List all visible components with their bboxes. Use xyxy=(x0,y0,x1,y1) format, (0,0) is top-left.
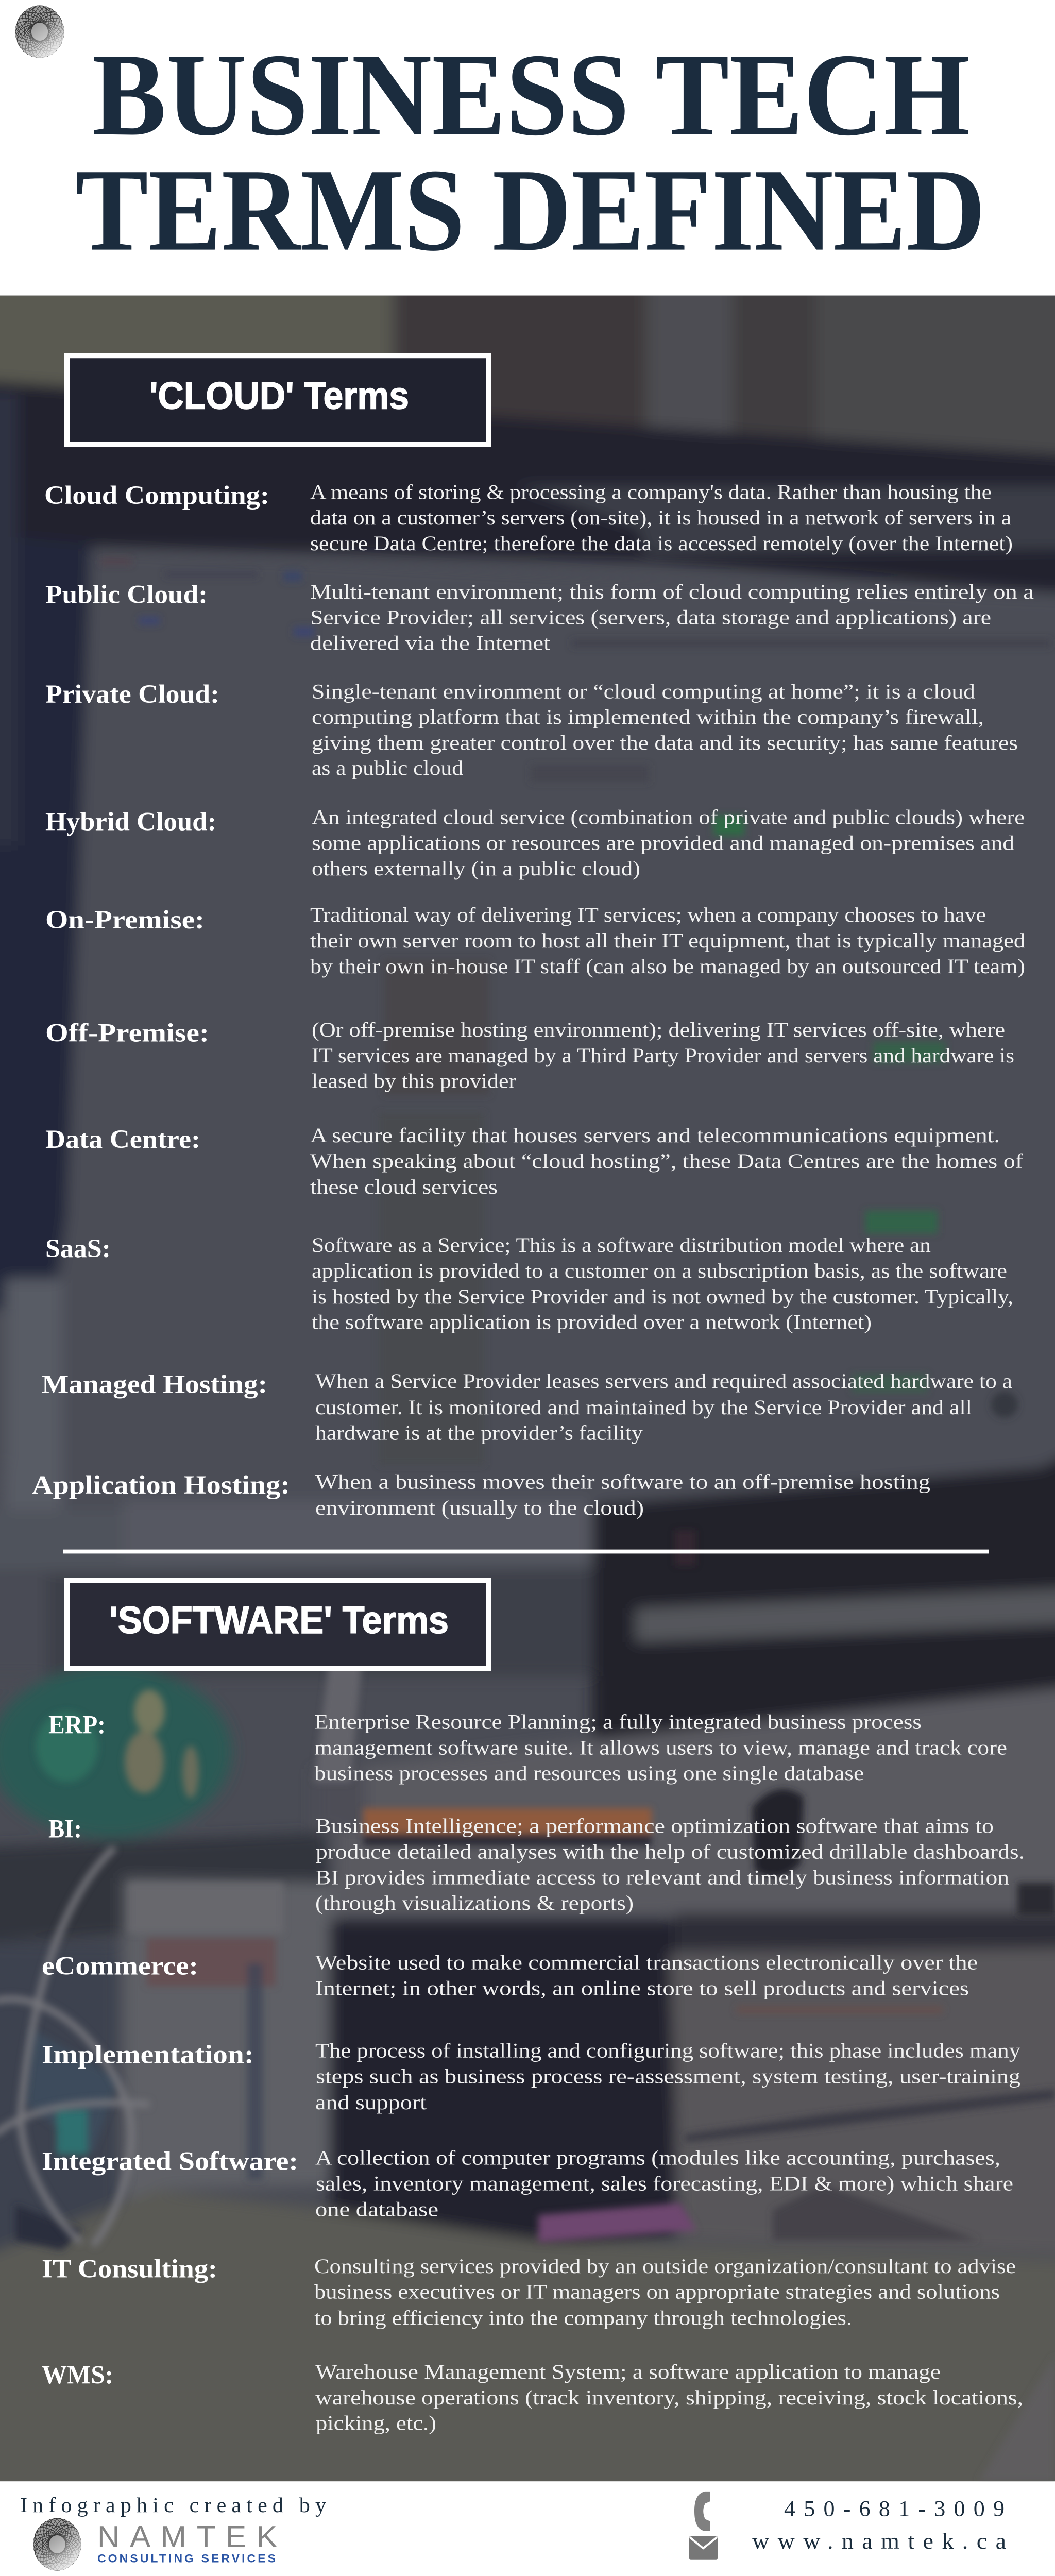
term: IT Consulting xyxy=(42,2255,1016,2329)
term: WMS: warehouse operations (track inventory, shipping, receiving, stock locations, xyxy=(315,2386,1023,2409)
term: Integrated Software: sales, inventory management, sales forecasting, EDI & more) which share xyxy=(316,2172,1013,2195)
term: BI: BI provides immediate access to relevant and timely business information xyxy=(315,1866,1009,1889)
term: On-Premise: On-Premise: xyxy=(45,905,205,935)
term: Cloud Computing xyxy=(44,481,1013,555)
term: ERP: business processes and resources using one single database xyxy=(314,1762,864,1785)
section box: CLOUD Terms xyxy=(67,355,488,444)
term: Managed Hosting xyxy=(42,1369,1012,1445)
term: Public Cloud xyxy=(45,580,1034,654)
term: Data Centre: A secure facility that houses servers and telecommunications equipment. xyxy=(310,1124,1000,1147)
phone number: 450-681-3009 xyxy=(784,2497,1005,2521)
term: IT Consulting: IT Consulting: xyxy=(42,2255,217,2283)
icon: top logo swirl xyxy=(11,4,68,59)
term: SaaS: the software application is provided over a network (Internet) xyxy=(312,1311,872,1334)
title xyxy=(75,29,985,276)
term: WMS: Warehouse Management System; a software application to manage xyxy=(315,2360,941,2383)
term: Integrated Software: one database xyxy=(315,2198,438,2221)
term: BI: Business Intelligence; a performance optimization software that aims to xyxy=(315,1815,994,1838)
term: Public Cloud: delivered via the Internet xyxy=(310,632,551,654)
term: IT Consulting: business executives or IT managers on appropriate strategies and solutions xyxy=(314,2280,1000,2303)
term: Cloud Computing: Cloud Computing: xyxy=(44,481,269,510)
term: Data Centre: When speaking about “cloud hosting”, these Data Centres are the homes of xyxy=(310,1149,1024,1173)
term: Managed Hosting: customer. It is monitored and maintained by the Service Provider and all xyxy=(315,1396,972,1419)
term: Public Cloud: Public Cloud: xyxy=(45,580,208,609)
footer background xyxy=(0,2481,1055,2576)
term: Private Cloud: Single-tenant environment or “cloud computing at home”; it is a cloud xyxy=(312,680,975,703)
term: IT Consulting: Consulting services provided by an outside organization/consultant to advise xyxy=(314,2255,1016,2278)
term: Managed Hosting: When a Service Provider leases servers and required associated hardware to a xyxy=(315,1369,1012,1393)
term: SaaS: is hosted by the Service Provider and is not owned by the customer. Typically, xyxy=(312,1285,1013,1308)
section box: SOFTWARE Terms xyxy=(67,1580,488,1668)
term: Off-Premise: leased by this provider xyxy=(312,1070,517,1092)
icon: footer logo swirl xyxy=(29,2517,85,2572)
term: Integrated Software xyxy=(42,2146,1013,2221)
term: SaaS: application is provided to a customer on a subscription basis, as the software xyxy=(312,1259,1007,1282)
term: Managed Hosting: hardware is at the provider’s facility xyxy=(315,1421,643,1445)
footer credit: Infographic created by xyxy=(20,2493,326,2517)
term: Integrated Software: A collection of computer programs (modules like accounting, purchases, xyxy=(315,2146,1000,2170)
term: BI xyxy=(48,1815,1025,1914)
term: Public Cloud: Service Provider; all services (servers, data storage and applications) are xyxy=(310,606,991,629)
term: Hybrid Cloud xyxy=(45,806,1025,880)
term: Data Centre xyxy=(45,1124,1024,1198)
term: Cloud Computing: A means of storing & processing a company's data. Rather than housing the xyxy=(310,481,992,503)
term: Private Cloud: giving them greater control over the data and its security; has same features xyxy=(312,731,1018,754)
term: Data Centre: these cloud services xyxy=(310,1175,498,1198)
term: BI: produce detailed analyses with the help of customized drillable dashboards. xyxy=(316,1840,1025,1863)
term: Hybrid Cloud: An integrated cloud service (combination of private and public clouds) where xyxy=(312,806,1025,828)
term: WMS: picking, etc.) xyxy=(316,2412,436,2435)
title: BUSINESS TECH xyxy=(92,29,970,160)
term: Hybrid Cloud: Hybrid Cloud: xyxy=(45,807,216,836)
term: On-Premise: their own server room to host all their IT equipment, that is typically managed xyxy=(310,929,1025,952)
term: Implementation xyxy=(42,2039,1021,2114)
icon: mail xyxy=(689,2536,718,2560)
term: SaaS: Software as a Service; This is a software distribution model where an xyxy=(312,1234,931,1257)
term: Implementation: steps such as business process re-assessment, system testing, user-training xyxy=(316,2065,1020,2088)
term: SaaS: SaaS: xyxy=(45,1234,111,1263)
header background xyxy=(0,0,1055,296)
term: Cloud Computing: data on a customer’s servers (on-site), it is housed in a network of servers in a xyxy=(310,506,1011,529)
term: Private Cloud: Private Cloud: xyxy=(45,680,219,709)
term: ERP: ERP: xyxy=(48,1710,106,1739)
term: eCommerce: eCommerce: xyxy=(42,1952,198,1980)
term: Application Hosting xyxy=(32,1470,930,1519)
term: Data Centre: Data Centre: xyxy=(45,1125,200,1154)
term: On-Premise: Traditional way of delivering IT services; when a company chooses to have xyxy=(310,904,986,926)
section box: SOFTWARE Terms: 'SOFTWARE' Terms xyxy=(109,1599,449,1641)
section box: CLOUD Terms: 'CLOUD' Terms xyxy=(149,374,409,417)
term: BI: (through visualizations & reports) xyxy=(315,1892,634,1914)
term: BI: BI: xyxy=(48,1815,82,1843)
term: eCommerce: Internet; in other words, an online store to sell products and services xyxy=(315,1977,969,1999)
term: ERP xyxy=(48,1710,1007,1785)
footer logo wordmark: NAMTEK xyxy=(97,2519,277,2553)
term: Off-Premise xyxy=(45,1018,1014,1092)
term: Private Cloud: as a public cloud xyxy=(312,756,463,779)
term: Application Hosting: When a business moves their software to an off-premise hosting xyxy=(315,1470,930,1493)
term: Off-Premise: (Or off-premise hosting environment); delivering IT services off-site, where xyxy=(312,1018,1005,1041)
term: eCommerce xyxy=(42,1951,978,1999)
website: www.namtek.ca xyxy=(752,2528,1006,2554)
term: Managed Hosting: Managed Hosting: xyxy=(42,1370,267,1399)
term: ERP: Enterprise Resource Planning; a fully integrated business process xyxy=(314,1710,922,1733)
term: On-Premise xyxy=(45,904,1025,978)
footer logo wordmark: CONSULTING SERVICES xyxy=(97,2552,276,2565)
term: Hybrid Cloud: some applications or resources are provided and managed on-premises and xyxy=(312,832,1014,854)
term: WMS xyxy=(42,2360,1023,2435)
term: Implementation: Implementation: xyxy=(42,2040,254,2069)
term: WMS: WMS: xyxy=(42,2361,113,2390)
term: eCommerce: Website used to make commercial transactions electronically over the xyxy=(315,1951,978,1974)
term: Cloud Computing: secure Data Centre; therefore the data is accessed remotely (over the Internet) xyxy=(310,532,1013,555)
term: Application Hosting: Application Hosting: xyxy=(32,1471,290,1500)
term: Private Cloud: computing platform that is implemented within the company’s firewall, xyxy=(312,706,984,728)
icon: phone xyxy=(694,2492,710,2531)
term: Public Cloud: Multi-tenant environment; this form of cloud computing relies entirely on a xyxy=(310,580,1034,603)
term: On-Premise: by their own in-house IT staff (can also be managed by an outsourced IT team) xyxy=(310,955,1025,978)
term: IT Consulting: to bring efficiency into the company through technologies. xyxy=(314,2307,852,2329)
title: TERMS DEFINED xyxy=(75,145,985,276)
term: ERP: management software suite. It allows users to view, manage and track core xyxy=(314,1736,1007,1759)
term: SaaS xyxy=(45,1234,1013,1334)
term: Hybrid Cloud: others externally (in a public cloud) xyxy=(312,857,640,880)
term: Off-Premise: Off-Premise: xyxy=(45,1019,209,1048)
term: Integrated Software: Integrated Software: xyxy=(42,2147,298,2176)
term: Off-Premise: IT services are managed by a Third Party Provider and servers and hardware is xyxy=(312,1044,1014,1067)
term: Implementation: The process of installing and configuring software; this phase includes many xyxy=(315,2039,1021,2062)
term: Application Hosting: environment (usually to the cloud) xyxy=(315,1497,644,1519)
term: Private Cloud xyxy=(45,680,1018,779)
term: Implementation: and support xyxy=(315,2091,427,2114)
